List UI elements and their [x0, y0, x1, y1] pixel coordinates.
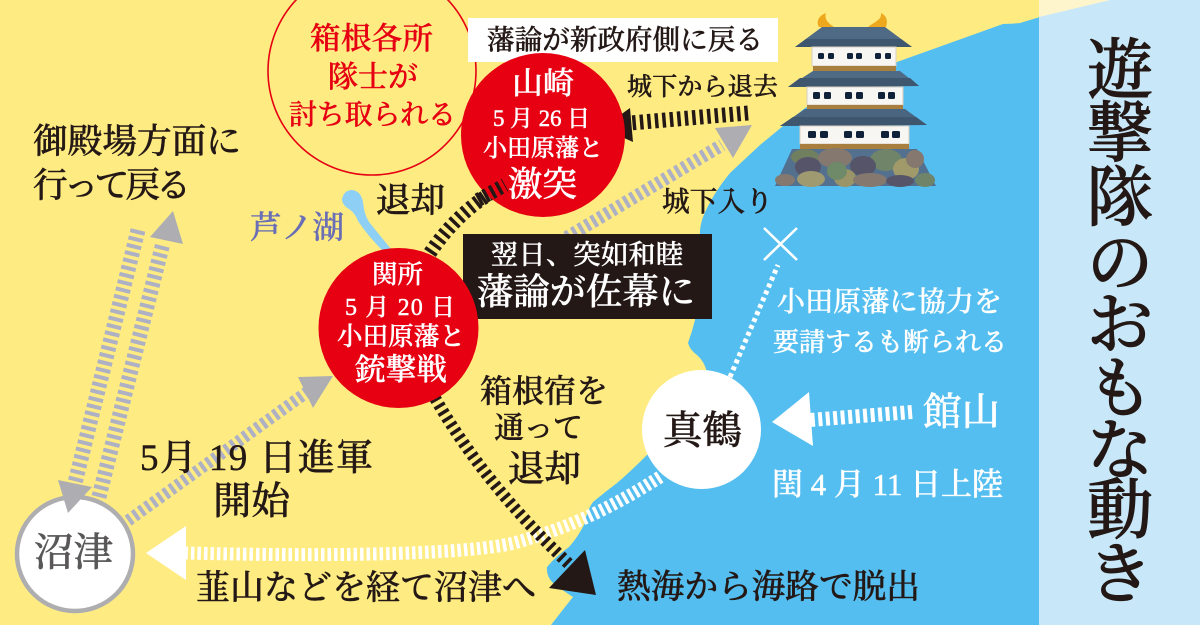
- node: Sekisho battle: [318, 248, 478, 408]
- label: landing date: 閏 4 月 11 日上陸: [772, 467, 1003, 502]
- title: vertical heading: き: [1087, 539, 1153, 612]
- label: Tateyama: 館山: [923, 391, 1000, 434]
- label: request refused: 小田原藩に協力を: [777, 286, 1002, 318]
- node: Manazuru: 真鶴: [663, 409, 742, 453]
- node: Yamazaki battle: 激突: [508, 166, 577, 204]
- callout: domain opinion returns to new government: [468, 18, 778, 62]
- callout: domain switches to shogunate side: 藩論が佐幕に: [477, 272, 695, 312]
- node: Sekisho battle: 銃撃戦: [355, 353, 447, 387]
- label: to Gotemba and back: 御殿場方面に: [33, 122, 241, 161]
- node: Manazuru: [642, 370, 761, 489]
- node: Yamazaki battle: 山崎: [512, 66, 574, 101]
- node: Sekisho battle: 小田原藩と: [337, 322, 465, 351]
- arrow: Manazuru to Odawara refused: [730, 265, 778, 377]
- title: vertical heading: の: [1087, 228, 1153, 301]
- label: march start May 19: [140, 437, 373, 523]
- lake Ashinoko: [342, 190, 391, 250]
- callout: domain switches to shogunate side: 翌日、突如和睦: [491, 240, 683, 270]
- node: Sekisho battle: 関所: [372, 260, 423, 289]
- arrow: retreat via Hakone to Atami: [435, 398, 596, 595]
- label: to Gotemba and back: [33, 122, 241, 205]
- node: Yamazaki battle: [461, 53, 625, 217]
- node: Yamazaki battle: 5 月 26 日: [493, 106, 590, 131]
- arrow: retreat from castle town to Yamazaki: [602, 108, 748, 142]
- label: retreat via Hakone-juku: 退却: [508, 448, 581, 489]
- title: vertical heading: 動: [1087, 475, 1153, 548]
- callout: domain switches to shogunate side: [463, 234, 712, 319]
- arrow: Numazu to Sekisho: [122, 376, 333, 525]
- label: via Nirayama to Numazu: 韮山などを経て沼津へ: [196, 569, 536, 607]
- icon: castle: [775, 13, 936, 187]
- title: vertical heading: な: [1087, 415, 1153, 488]
- title: vertical heading: [1087, 35, 1153, 612]
- label: retreat (upper): 退却: [376, 182, 445, 220]
- label: enter castle town: 城下入り: [662, 186, 773, 217]
- label: escape by sea from Atami: 熱海から海路で脱出: [617, 568, 920, 606]
- label: march start May 19: 5月 19 日進軍: [140, 437, 373, 479]
- node: Sekisho battle: 5 月 20 日: [345, 295, 455, 321]
- label: left castle town: 城下から退去: [627, 73, 778, 101]
- callout: Hakone scouts killed: [268, 0, 476, 175]
- side panel corner: [1039, 0, 1110, 17]
- icon: refused cross: [764, 228, 797, 260]
- label: request refused: [773, 286, 1007, 357]
- callout: Hakone scouts killed: 隊士が: [328, 61, 418, 94]
- arrow: Tateyama to Manazuru: [772, 392, 912, 446]
- callout: Hakone scouts killed: 討ち取られる: [289, 99, 456, 131]
- title: vertical heading: 撃: [1087, 98, 1153, 171]
- label: retreat via Hakone-juku: 通って: [494, 412, 583, 445]
- map background: sea: [547, 17, 1040, 625]
- callout: Hakone scouts killed: 箱根各所: [310, 22, 433, 56]
- arrowhead: into Numazu: [58, 480, 92, 513]
- arrow: Gotemba back to Numazu: [75, 230, 138, 483]
- title: vertical heading: 遊: [1087, 35, 1153, 108]
- node: Yamazaki battle: 小田原藩と: [483, 135, 603, 162]
- node: Numazu: [17, 497, 133, 611]
- title: vertical heading: も: [1087, 353, 1153, 426]
- arrow: to castle town: [470, 125, 752, 295]
- title: vertical heading: 隊: [1087, 162, 1153, 235]
- label: march start May 19: 開始: [213, 481, 292, 523]
- label: retreat via Hakone-juku: [480, 373, 608, 489]
- side panel background: [1039, 0, 1200, 625]
- label: retreat via Hakone-juku: 箱根宿を: [480, 373, 608, 409]
- label: to Gotemba and back: 行って戻る: [33, 166, 191, 205]
- arrow: Numazu to Gotemba: [99, 211, 183, 497]
- arrow: retreat Sekisho to Yamazaki: [430, 185, 505, 253]
- callout: domain opinion returns to new government: 藩論が新政府側に戻る: [487, 24, 763, 55]
- label: Ashinoko: 芦ノ湖: [250, 210, 344, 245]
- label: request refused: 要請するも断られる: [773, 328, 1007, 357]
- arrow: Manazuru to Numazu: [146, 477, 660, 580]
- node: Numazu: 沼津: [34, 531, 113, 575]
- title: vertical heading: お: [1087, 289, 1153, 362]
- arrow: retreat overlap on Yamazaki: [478, 185, 505, 200]
